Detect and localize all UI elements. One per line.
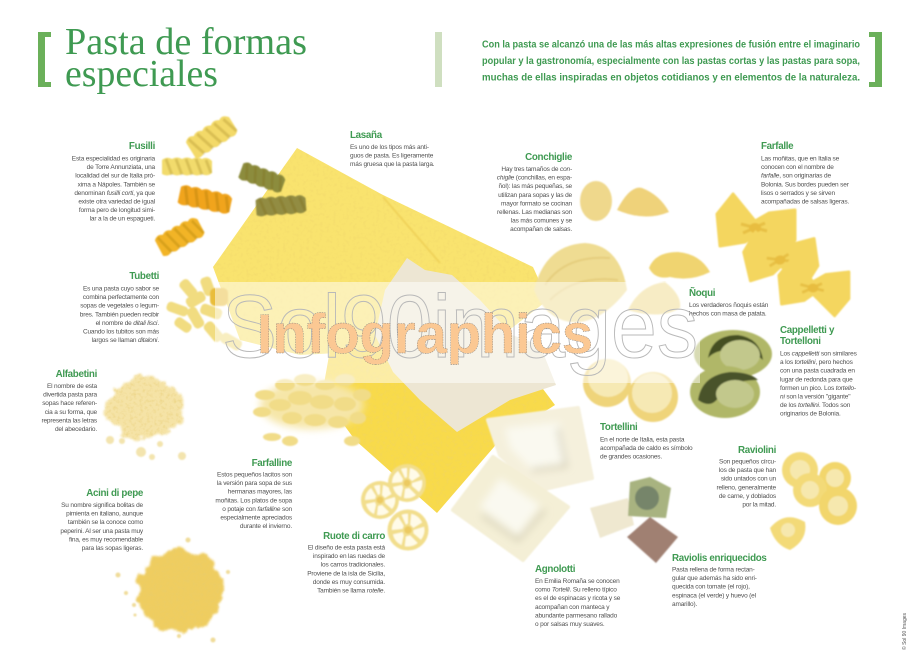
pasta: raviolis enriquecidos	[590, 477, 678, 563]
text block: raviolis enriquecidos: amarillo).	[672, 601, 697, 608]
pasta: pale lasagna sheet	[375, 258, 556, 432]
text block: agnolotti: como Tortelli. Su relleno típico	[535, 587, 617, 594]
text block: ruote di carro: donde es muy consumida.	[313, 579, 385, 586]
text block: farfalle: Bolonia. Sus bordes pueden ser	[761, 181, 850, 188]
text block: farfalle: Farfalle	[761, 141, 794, 152]
pasta: tortellini	[583, 359, 678, 422]
text block: fusilli: de Torre Annunziata, una	[87, 164, 156, 171]
text block: farfalline: hermanas mayores, las	[228, 489, 293, 496]
text block: alfabetini: representa las letras	[41, 417, 98, 424]
text block: farfalline: especialmente apreciados	[220, 514, 293, 522]
watermark: Sol90images: Sol90images	[222, 276, 698, 376]
text block: raviolini: Raviolini	[738, 445, 777, 456]
text block: fusilli: Fusilli	[129, 141, 156, 152]
text block: alfabetini: Alfabetini	[56, 369, 98, 380]
text block: ruote di carro: Ruote di carro	[323, 531, 385, 542]
text block: tubetti	[80, 271, 160, 344]
text block: cappelletti y tortelloni: de los tortellini. Todos son	[780, 402, 851, 409]
text block: farfalline: la versión para sopa de sus	[217, 480, 293, 487]
text block: fusilli	[72, 141, 156, 223]
text block: agnolotti: Agnolotti	[535, 564, 576, 575]
text block: raviolini: Son pequeños círcu-	[719, 458, 776, 466]
text block: raviolis enriquecidos	[672, 553, 767, 608]
text block: cappelletti y tortelloni: a los tortellini, pero hechos	[780, 359, 854, 366]
title: especiales	[65, 53, 218, 95]
text block: raviolis enriquecidos: quecida con tomate (el rojo),	[672, 584, 750, 591]
pasta: fusilli	[153, 113, 307, 258]
text block: agnolotti: abundante parmesano rallado	[535, 612, 618, 619]
text block: conchiglie: mayor formato se cocinan	[501, 200, 573, 207]
text block: alfabetini	[41, 369, 98, 433]
text block: conchiglie: Conchiglie	[525, 152, 573, 163]
text block: raviolis enriquecidos: espinaca (el verde) y huevo (el	[672, 592, 757, 599]
text block: conchiglie	[497, 152, 573, 233]
right bracket	[869, 32, 882, 87]
text block: conchiglie: las más comunes y se	[511, 218, 573, 225]
text block: ruote di carro: inspirado en las ruedas de	[313, 553, 386, 560]
text block: farfalline: Estos pequeños lacitos son	[217, 472, 293, 478]
text block: lasaña	[350, 130, 435, 168]
text block: tortellini: de grandes ocasiones.	[600, 454, 662, 461]
text block: farfalline: Farfalline	[252, 458, 293, 469]
text block: raviolini	[716, 445, 777, 508]
text block: cappelletti y tortelloni: Cappelletti y	[780, 325, 835, 336]
text block: conchiglie: rellenas. Las medianas son	[497, 209, 573, 216]
text block: acini di pepe	[60, 488, 144, 552]
text block: lasaña: Lasaña	[350, 130, 383, 141]
left bracket	[38, 32, 51, 87]
text block: raviolis enriquecidos: Pasta rellena de forma rectan-	[672, 566, 755, 574]
text block: raviolini: por la mitad.	[742, 502, 776, 508]
pasta: farfalle	[717, 194, 849, 316]
text block: tubetti: el nombre de ditali lisci.	[96, 320, 159, 327]
text block: agnolotti: acompañan con manteca y	[535, 604, 610, 611]
text block: farfalline: o potaje con farfalline son	[222, 506, 293, 513]
text block: ruote di carro: El diseño de esta pasta está	[308, 544, 386, 552]
text block: farfalline: durante el invierno.	[240, 523, 292, 530]
text block: alfabetini: El nombre de esta	[47, 383, 98, 390]
text block: ruote di carro	[307, 531, 386, 594]
text block: fusilli: xima a Nápoles. También se	[78, 181, 156, 188]
text block: raviolini: relleno, generalmente	[716, 484, 777, 491]
text block: raviolis enriquecidos: gular que además ha sido enri-	[672, 575, 757, 582]
text block: agnolotti	[535, 564, 621, 628]
pasta: ruote di carro	[361, 464, 429, 551]
text block: tubetti: bres. También pueden recibir	[80, 311, 160, 318]
text block: conchiglie: acompañan de salsas.	[510, 226, 572, 233]
text block: ruote di carro: los carros tradicionales.	[321, 562, 385, 569]
text block: raviolini: de carne, y doblados	[719, 493, 777, 500]
intro text	[482, 40, 860, 84]
pasta: lasaña	[213, 148, 555, 513]
text block: raviolis enriquecidos: Raviolis enriquecidos	[672, 553, 767, 564]
text block: acini di pepe: también se la conoce como	[68, 519, 144, 526]
divider bar	[435, 32, 442, 87]
text block: farfalle: lisos o serrados y se sirven	[761, 190, 835, 197]
text block: ñoqui: Ñoqui	[689, 288, 716, 299]
text block: fusilli: denominan fusilli corti, ya que	[74, 190, 156, 197]
text block: conchiglie: chiglie (conchillas, en espa-	[497, 175, 572, 182]
text block: cappelletti y tortelloni: ni son la versión "gigante"	[780, 394, 851, 400]
text block: cappelletti y tortelloni: formen un pico. Los tortello-	[780, 385, 857, 392]
text block: tortellini: En el norte de Italia, esta pasta	[600, 436, 685, 444]
text block: ñoqui	[689, 288, 769, 318]
pasta: tubetti	[165, 275, 244, 352]
text block: agnolotti: o por salsas muy suaves.	[535, 621, 605, 628]
text block: conchiglie: ñol): las más pequeñas, se	[498, 183, 573, 190]
text block: acini di pepe: pimienta en italiano, aunque	[66, 511, 144, 518]
text block: cappelletti y tortelloni: Tortelloni	[780, 336, 821, 347]
text block: cappelletti y tortelloni: con una pasta cuadrada en	[780, 368, 855, 375]
text block: conchiglie: utilizan para sopas y las de	[498, 192, 573, 199]
text block: farfalle: Las moñitas, que en Italia se	[761, 156, 840, 162]
intro text: popular y la gastronomía, especialmente con las pastas cortas y las pastas para sopa,	[482, 56, 860, 67]
text block: cappelletti y tortelloni	[780, 325, 858, 418]
text block: raviolini: sido untados con un	[721, 476, 777, 483]
text block: farfalline: moñitas. Los platos de sopa	[215, 497, 293, 504]
title: Pasta de formas	[65, 21, 307, 63]
text block: tubetti: Cuando los tubitos son más	[83, 328, 160, 336]
text block: acini di pepe: fina, es muy recomendable	[69, 536, 144, 543]
text block: alfabetini: cia a su forma, que	[45, 409, 98, 416]
text block: tubetti: sopas de vegetales o legum-	[80, 303, 159, 310]
text block: acini di pepe: para las sopas ligeras.	[82, 545, 143, 552]
text block: cappelletti y tortelloni: lugar de redonda para que	[780, 376, 853, 383]
text block: lasaña: Es uno de los tipos más anti-	[350, 144, 429, 151]
text block: ruote di carro: Proviene de la isla de Sicilia,	[307, 570, 385, 577]
watermark: Infographics: Infographics	[257, 302, 593, 365]
intro text: Con la pasta se alcanzó una de las más altas expresiones de fusión entre el imaginario	[482, 40, 860, 50]
text block: ñoqui: Los verdaderos ñoquis están	[689, 302, 769, 309]
text block: cappelletti y tortelloni: Los cappelletti son similares	[780, 350, 858, 358]
text block: acini di pepe: peperini. Al ser una pasta muy	[60, 528, 144, 535]
pasta: acini di pepe	[116, 538, 230, 642]
text block: ruote di carro: También se llama rotelle.	[317, 588, 385, 594]
text block: farfalle: conocen con el nombre de	[761, 164, 834, 171]
text block: farfalline	[215, 458, 293, 530]
text block: lasaña: guos de pasta. Es ligeramente	[350, 153, 434, 160]
intro text: muchas de ellas inspiradas en objetos cotidianos y en elementos de la naturaleza.	[482, 72, 860, 84]
text block: conchiglie: Hay tres tamaños de con-	[501, 166, 573, 173]
text block: tubetti: Es una pasta cuyo sabor se	[83, 286, 160, 292]
pasta: cappelletti y tortelloni	[690, 330, 772, 418]
credit: © Sol 90 Images	[901, 612, 908, 650]
text block: fusilli: forma pero de longitud simi-	[79, 207, 155, 214]
pasta: conchiglie	[534, 181, 710, 322]
text block: agnolotti: es el de espinacas y ricota y se	[535, 595, 621, 602]
text block: tubetti: largos se llaman ditaloni.	[92, 337, 159, 344]
text block: fusilli: lar a la de un espagueti.	[90, 216, 155, 223]
text block: tortellini: Tortellini	[600, 422, 638, 433]
pasta: agnolotti	[453, 408, 592, 560]
text block: cappelletti y tortelloni: originarios de Bolonia.	[780, 411, 841, 418]
text block: raviolini: los de pasta que han	[719, 467, 777, 474]
text block: tortellini	[600, 422, 693, 461]
text block: acini di pepe: Su nombre significa bolitas de	[61, 502, 144, 509]
text block: alfabetini: divertida pasta para	[43, 392, 98, 399]
text block: fusilli: localidad del sur de Italia pró-	[75, 173, 155, 180]
pasta: farfalline	[253, 374, 371, 446]
text block: ñoqui: hechos con masa de patata.	[689, 311, 767, 318]
text block: lasaña: más gruesa que la pasta larga.	[350, 161, 435, 168]
watermark band	[215, 282, 700, 383]
text block: tubetti: combina perfectamente con	[83, 294, 160, 301]
text block: farfalle	[761, 141, 850, 206]
title	[65, 21, 307, 95]
text block: farfalle: acompañadas de salsas ligeras.	[761, 198, 849, 206]
pasta: ñoqui	[628, 282, 680, 315]
pasta: raviolini	[770, 452, 857, 550]
text block: alfabetini: sopas hace referen-	[42, 400, 97, 407]
text block: tortellini: acompañada de caldo es símbolo	[600, 445, 693, 452]
text block: fusilli: existe otra variedad de igual	[78, 198, 156, 206]
text block: acini di pepe: Acini di pepe	[86, 488, 144, 499]
text block: farfalle: farfalle, son originarias de	[761, 173, 831, 180]
text block: fusilli: Esta especialidad es originaria	[72, 156, 156, 162]
text block: agnolotti: En Emilia Romaña se conocen	[535, 578, 620, 585]
text block: tubetti: Tubetti	[129, 271, 160, 282]
pasta: alfabetini	[106, 377, 186, 460]
text block: alfabetini: del abecedario.	[55, 426, 97, 433]
